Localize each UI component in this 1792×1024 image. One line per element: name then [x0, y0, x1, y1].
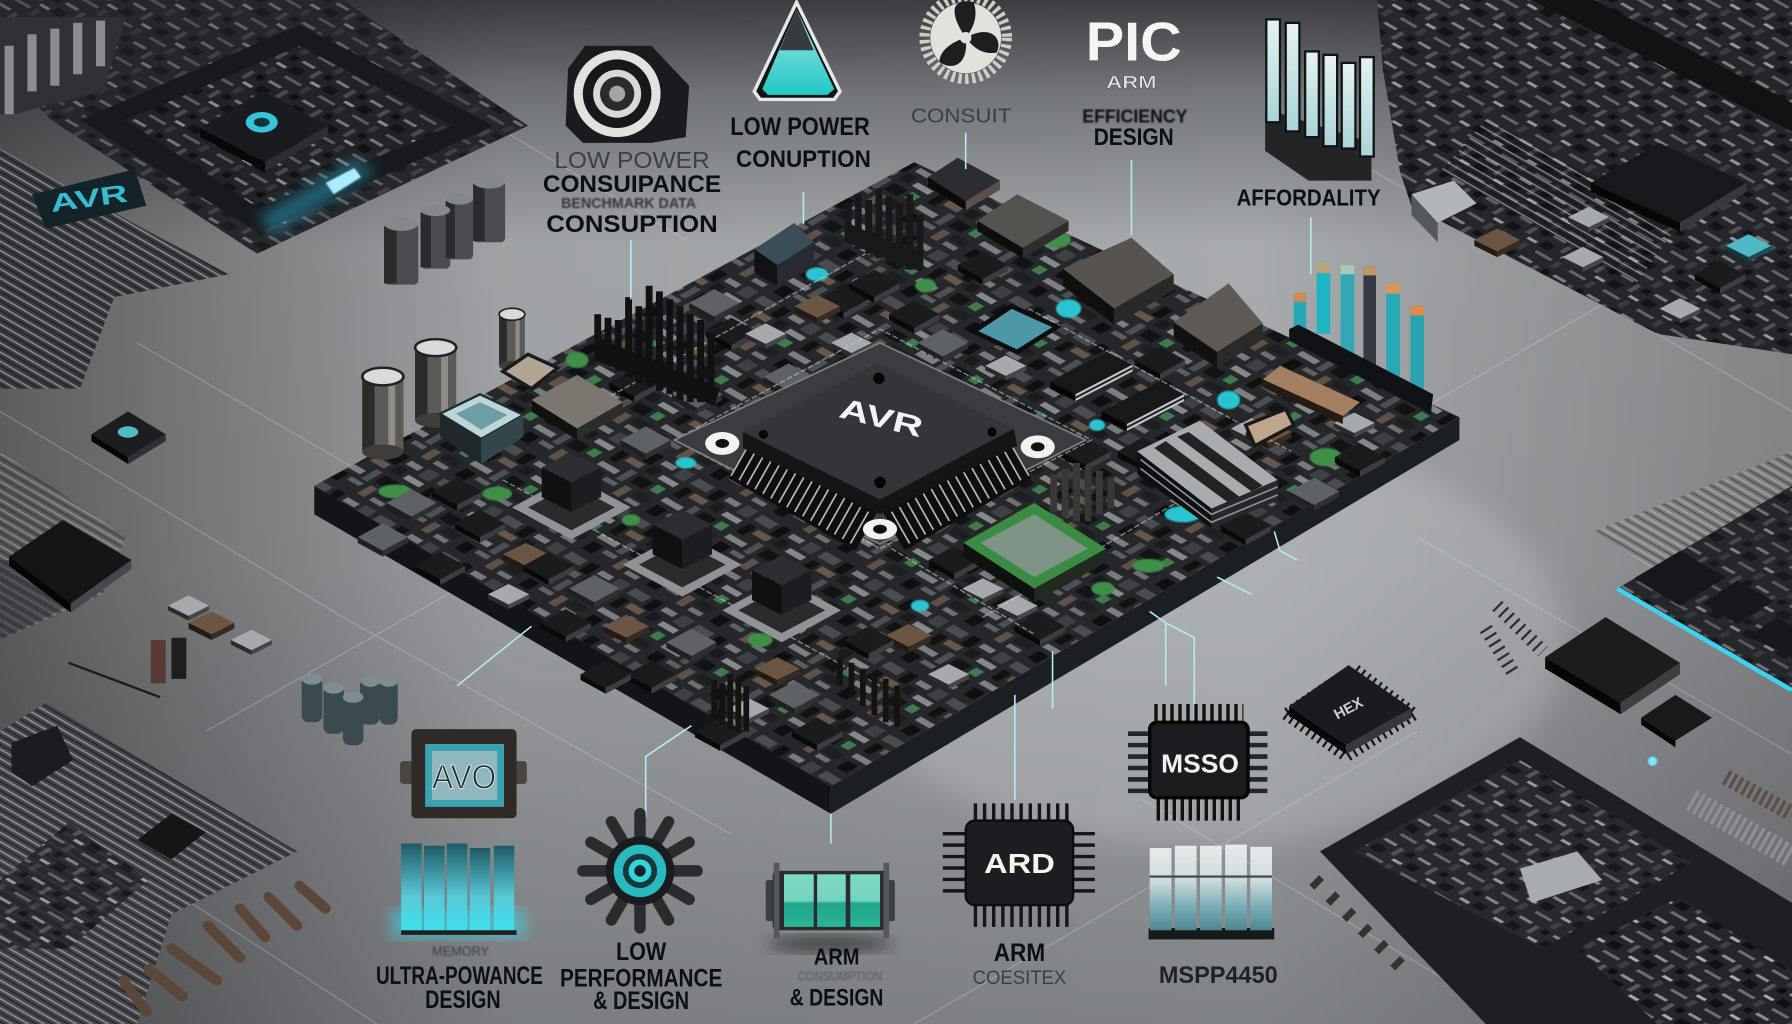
capacitor: short left — [415, 339, 456, 428]
icon: small left chip — [91, 411, 166, 464]
chip: large grey package — [1063, 238, 1174, 325]
icon: large black chip — [1591, 143, 1746, 232]
small black chip — [137, 814, 206, 859]
long IC upper — [1050, 352, 1133, 401]
central AVR chip — [705, 363, 1055, 539]
tan block — [1246, 409, 1294, 446]
text: ultra-powance design: DESIGN — [425, 986, 501, 1014]
text: PIC and ARM heading: ARM — [1106, 72, 1157, 92]
teal cube — [440, 394, 523, 464]
text: efficiency design — [1082, 105, 1187, 151]
heatsink spikes: left — [594, 286, 720, 406]
icon: AVO display frame: AVO — [432, 759, 496, 797]
panel: top-right circuit board — [1377, 0, 1792, 354]
small black block — [11, 726, 73, 786]
text: arm coesitex — [973, 939, 1066, 989]
icon: MSSO chip — [1138, 713, 1257, 808]
green and cyan highlights — [378, 232, 1342, 647]
chip body — [743, 429, 1017, 514]
long IC lower — [1102, 382, 1184, 431]
text: low performance and design: LOW — [616, 938, 667, 966]
text: low performance and design — [560, 938, 722, 1015]
ribbed dark block — [1054, 463, 1111, 521]
brown long module — [1263, 366, 1360, 424]
icon: dark chip with cyan dot — [200, 91, 328, 171]
icon: glowing cyan bars — [391, 843, 526, 938]
brown pin scatter — [123, 886, 326, 1011]
text: low performance and design: & DESIGN — [593, 987, 689, 1015]
icon: AVO display frame — [400, 729, 527, 818]
glow point — [1648, 757, 1657, 766]
icon: isometric black chip: HEX — [1332, 695, 1366, 723]
chip: top corner — [928, 158, 1000, 210]
cube on pad 2 — [623, 510, 742, 597]
text: arm coesitex: COESITEX — [973, 967, 1066, 989]
icon: ARD chip — [955, 814, 1083, 914]
chip: ribbed package — [977, 194, 1069, 258]
washers — [705, 432, 1055, 539]
capacitor: slim copper — [499, 308, 525, 371]
text: arm and design — [790, 944, 883, 1012]
AVR label: AVR — [836, 393, 927, 444]
chip box: teal module — [754, 223, 814, 286]
text: ultra-powance design — [376, 944, 543, 1014]
text: arm and design: CONSUMPTION — [798, 970, 882, 984]
panel: right-side traces and board — [1486, 451, 1792, 691]
AVR chip tag — [32, 169, 146, 229]
icon: concentric ring sensor — [566, 46, 689, 143]
capacitor: tall left — [362, 368, 403, 460]
text: ultra-powance design: ULTRA-POWANCE — [376, 962, 543, 990]
scattered components — [358, 251, 1385, 751]
text: arm coesitex: ARM — [994, 939, 1045, 967]
bar cluster on rail — [1289, 263, 1433, 414]
connector lines — [457, 133, 1311, 843]
icon: white fan gear — [925, 0, 1007, 79]
icon: MSSO chip: MSSO — [1161, 749, 1239, 779]
chip: grey package right — [1174, 283, 1263, 368]
text: low power conuption — [730, 113, 871, 173]
capacitors: top-left row — [384, 175, 505, 285]
tan socket — [503, 354, 558, 389]
black chips on right board — [1634, 551, 1792, 657]
text: efficiency design: EFFICIENCY — [1082, 105, 1187, 126]
chip fins — [739, 459, 1021, 531]
AVR chip tag: AVR — [49, 180, 129, 218]
icon: small black chip right — [1641, 695, 1712, 747]
icon: textured black chip — [1545, 617, 1680, 714]
panel: main circuit board — [314, 158, 1459, 814]
text: low power consuipance: LOW POWER — [554, 147, 710, 173]
capacitors: lower-left cluster — [302, 673, 398, 745]
text: ultra-powance design: MEMORY — [432, 944, 490, 958]
text: low power consuipance — [543, 147, 721, 238]
icon: white bar stack — [1265, 19, 1374, 181]
cube on pad 1 — [512, 453, 631, 539]
text: low power conuption: LOW POWER — [730, 113, 870, 141]
text: arm and design: & DESIGN — [790, 985, 883, 1012]
heatsink spikes: top — [846, 189, 923, 272]
panel: left edge traces — [0, 149, 229, 640]
panel: bottom-left circuit board — [0, 703, 297, 1024]
silver routing streets — [503, 246, 1291, 686]
text: arm and design: ARM — [814, 944, 859, 970]
text: PIC and ARM heading: PIC — [1086, 11, 1182, 73]
text: consuit: CONSUIT — [911, 104, 1012, 127]
text: low power conuption: CONUPTION — [736, 146, 871, 173]
pin rows: lower board — [714, 657, 897, 731]
board surface — [314, 162, 1459, 786]
icon: isometric black chip — [1286, 665, 1415, 757]
icon: cyan cone — [754, 2, 840, 99]
icon: black gear with teal eye — [583, 814, 697, 928]
grey package — [531, 375, 623, 440]
board thickness — [314, 417, 1459, 814]
icon: silver module — [1411, 181, 1477, 242]
text: msp4450: MSPP4450 — [1159, 962, 1278, 989]
icon: tinted bar swatches — [1149, 845, 1274, 939]
cyan IC — [974, 306, 1057, 352]
text: low power consuipance: CONSUIPANCE — [543, 171, 721, 198]
panel: top-left circuit board — [0, 0, 528, 254]
cube on pad 3 — [722, 555, 841, 642]
striped stack module — [1137, 421, 1278, 528]
red-capped pins left — [69, 638, 186, 697]
icon: green battery — [766, 863, 895, 953]
panel: bottom-right circuit board — [1314, 737, 1792, 1024]
text: low performance and design: PERFORMANCE — [560, 964, 722, 992]
icon: ARD chip: ARD — [984, 848, 1055, 879]
text: low power consuipance: BENCHMARK DATA — [561, 196, 696, 212]
panel: left-mid chip and traces — [0, 520, 272, 655]
text: efficiency design: DESIGN — [1094, 124, 1174, 151]
screw dots — [759, 373, 997, 488]
central chip socket — [674, 343, 1086, 544]
green IC — [963, 503, 1106, 602]
text: affordality: AFFORDALITY — [1237, 185, 1381, 211]
text: low power consuipance: CONSUPTION — [546, 211, 718, 238]
